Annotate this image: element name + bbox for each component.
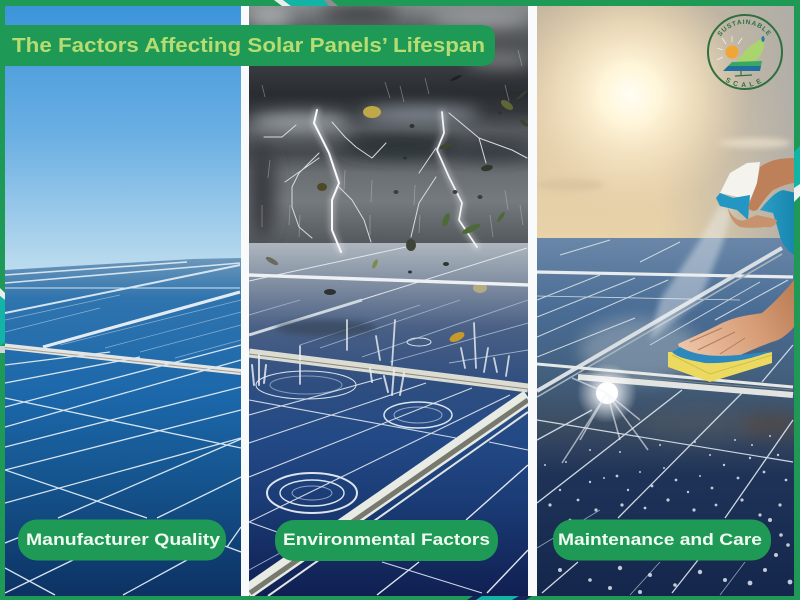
- logo: Sustainable Scale: [707, 14, 783, 90]
- grid: [537, 240, 793, 595]
- panel: environmental factors: [247, 6, 534, 596]
- label: manufacturer quality: [18, 520, 226, 560]
- cleaning hand with sponge: [668, 280, 794, 382]
- logo solar panel: [723, 61, 762, 76]
- title banner: The Factors Affecting Solar Panels’ Lifespan: [12, 35, 485, 57]
- logo leaf: [736, 38, 764, 62]
- panel: maintenance and care: [536, 6, 800, 596]
- debris leaves: [265, 74, 529, 344]
- spray mist: [650, 205, 732, 340]
- storm clouds: [248, 6, 534, 240]
- logo sun: [726, 46, 738, 58]
- panel grid and rails: [249, 247, 529, 595]
- label: maintenance and care: Maintenance and Care: [558, 530, 762, 549]
- water speckles: [544, 435, 792, 594]
- border accent: bottom: [467, 596, 532, 600]
- horizontal rail: [537, 364, 793, 395]
- logo rays: [717, 36, 742, 60]
- logo bottom text: SCALE: [726, 78, 762, 87]
- logo top text: SUSTAINABLE: [718, 19, 772, 36]
- label: manufacturer quality: Manufacturer Quality: [26, 530, 221, 549]
- spray bottle with hand: [716, 158, 796, 256]
- title banner: [0, 25, 495, 66]
- label: environmental factors: Environmental Factors: [283, 530, 490, 549]
- water ripples: [256, 338, 452, 513]
- dark splash patch: [276, 320, 376, 336]
- border accent: left: [0, 288, 5, 353]
- label: maintenance and care: [553, 520, 771, 560]
- border accent: right: [794, 146, 800, 202]
- rain streaks: [262, 50, 523, 237]
- panel: manufacturer quality: [0, 6, 241, 596]
- horizontal rail: [249, 353, 528, 389]
- white panel separators: [241, 6, 537, 596]
- logo drop: [761, 36, 765, 42]
- border accent: top: [274, 0, 338, 6]
- label: environmental factors: [275, 520, 498, 561]
- water splashes: [252, 320, 509, 395]
- lightning bolts: [264, 110, 527, 252]
- sun flare: [562, 363, 648, 463]
- diagonal rail: [537, 248, 782, 397]
- central diagonal rail: [247, 397, 528, 596]
- panel haze: [580, 318, 700, 382]
